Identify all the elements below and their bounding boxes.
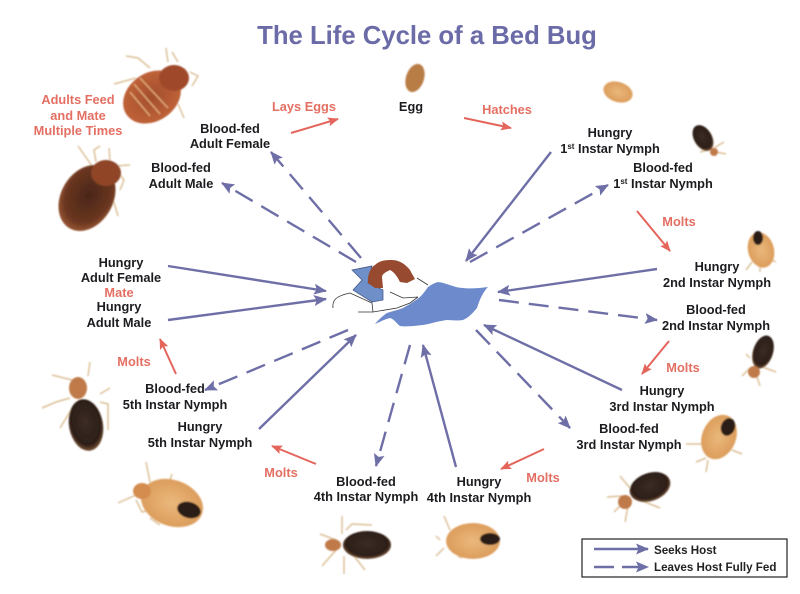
arrow: blood-fed 4th instar leaves host <box>376 345 410 466</box>
label: blood-fed adult female: Adult Female <box>190 136 270 151</box>
arrow: blood-fed adult female leaves host <box>271 152 361 258</box>
icon: bed bug 4th instar hungry <box>436 516 500 559</box>
arrow: blood-fed 2nd instar leaves host <box>499 300 657 320</box>
label: hungry 1st instar: Hungry <box>588 125 632 140</box>
icon: bed bug 5th instar fed <box>42 362 110 454</box>
icon: bed bug 3rd instar fed <box>607 467 675 522</box>
arrow: hungry 1st instar seeks host <box>466 152 551 261</box>
label: blood-fed 1st instar: Blood-fed <box>633 160 693 175</box>
legend <box>582 539 787 577</box>
label: molts right upper: Molts <box>662 214 696 229</box>
label: hungry 1st instar: Instar Nymph <box>574 141 660 156</box>
label: molts bottom right: Molts <box>526 470 560 485</box>
label: molts bottom left: Molts <box>264 465 298 480</box>
icon: bed bug 2nd instar fed <box>742 333 778 386</box>
arrow: molts 4th to 5th <box>272 446 316 464</box>
label: blood-fed 1st instar: 1 <box>613 176 620 191</box>
arrow: blood-fed 3rd instar leaves host <box>476 330 570 428</box>
arrow: hungry adult female seeks host <box>168 266 326 291</box>
label: blood-fed 1st instar: st <box>620 177 628 186</box>
label: blood-fed 2nd instar: Blood-fed <box>686 302 746 317</box>
arrow: blood-fed 5th instar leaves host <box>205 330 348 390</box>
label: hungry adults and mate: Adult Male <box>87 315 151 330</box>
icon: bed bug blood-fed adult male <box>47 146 130 241</box>
arrow: molts 5th to adult <box>160 339 176 374</box>
label: hungry 5th instar: 5th Instar Nymph <box>148 435 252 450</box>
label: blood-fed 5th instar: 5th Instar Nymph <box>123 397 227 412</box>
label: blood-fed 2nd instar: 2nd Instar Nymph <box>662 318 770 333</box>
arrow: lays eggs <box>291 119 338 133</box>
icon: bed bug 2nd instar hungry <box>744 229 778 272</box>
arrow: hungry 2nd instar seeks host <box>498 269 657 292</box>
icon: bed bug 3rd instar hungry <box>686 409 743 472</box>
label: adults feed and mate: and Mate <box>50 108 106 123</box>
arrow: hungry 5th instar seeks host <box>259 335 356 429</box>
label: blood-fed 1st instar: Instar Nymph <box>627 176 713 191</box>
label: hungry 2nd instar: 2nd Instar Nymph <box>663 275 771 290</box>
label: hungry 2nd instar: Hungry <box>695 259 739 274</box>
label: molts left: Molts <box>117 354 151 369</box>
label: hungry adults and mate: Hungry <box>97 299 142 314</box>
label: hungry 5th instar: Hungry <box>178 419 222 434</box>
label: hungry 1st instar: 1 <box>560 141 567 156</box>
arrow: hungry 3rd instar seeks host <box>484 325 622 390</box>
illustration: sleeping person under blue blanket <box>333 260 488 326</box>
label: blood-fed adult male: Blood-fed <box>151 160 211 175</box>
label: blood-fed 3rd instar: 3rd Instar Nymph <box>576 437 682 452</box>
label: blood-fed 4th instar: Blood-fed <box>336 474 396 489</box>
label: hungry 3rd instar: Hungry <box>640 383 684 398</box>
legend: solid arrow <box>594 548 648 550</box>
label: blood-fed 5th instar: Blood-fed <box>145 381 205 396</box>
legend: dashed arrow <box>594 566 648 568</box>
label: molts right lower: Molts <box>666 360 700 375</box>
label: lays eggs: Lays Eggs <box>272 99 336 114</box>
label: adults feed and mate: Multiple Times <box>34 123 122 138</box>
label: hatches: Hatches <box>482 102 532 117</box>
icon: bed bug 5th instar hungry <box>118 462 210 536</box>
title: The Life Cycle of a Bed Bug <box>257 22 597 50</box>
arrow: hatches <box>464 118 511 128</box>
arrow: hungry 4th instar seeks host <box>423 345 456 467</box>
arrow: blood-fed 1st instar leaves host <box>470 185 608 262</box>
arrow: blood-fed adult male leaves host <box>222 183 356 262</box>
label: hungry 3rd instar: 3rd Instar Nymph <box>609 399 715 414</box>
label: hungry adults and mate: Adult Female <box>81 270 161 285</box>
arrow: hungry adult male seeks host <box>168 299 326 320</box>
icon: bed bug blood-fed adult female <box>113 48 198 134</box>
label: adults feed and mate: Adults Feed <box>41 92 115 107</box>
icon: bed bug 1st instar hungry <box>601 78 635 106</box>
label: hungry adults and mate: Hungry <box>99 255 143 270</box>
label: blood-fed adult male: Adult Male <box>149 176 213 191</box>
label: hungry 1st instar: st <box>567 142 575 151</box>
label: hungry adults and mate: Mate <box>104 285 134 300</box>
label: egg: Egg <box>399 99 423 114</box>
icon: bed bug 4th instar fed <box>320 516 391 574</box>
label: blood-fed 4th instar: 4th Instar Nymph <box>314 489 418 504</box>
label: hungry 4th instar: 4th Instar Nymph <box>427 490 531 505</box>
arrow: molts 2nd to 3rd <box>642 341 669 374</box>
label: blood-fed 3rd instar: Blood-fed <box>599 421 659 436</box>
legend: leaves host text: Leaves Host Fully Fed <box>654 561 776 574</box>
arrow: molts 3rd to 4th <box>501 449 544 469</box>
label: blood-fed adult female: Blood-fed <box>200 121 260 136</box>
icon: bed bug 1st instar fed <box>688 121 726 156</box>
icon: egg <box>402 61 428 95</box>
label: hungry 4th instar: Hungry <box>457 474 501 489</box>
arrow: molts 1st to 2nd <box>637 211 670 251</box>
legend: seeks host text: Seeks Host <box>654 544 717 557</box>
